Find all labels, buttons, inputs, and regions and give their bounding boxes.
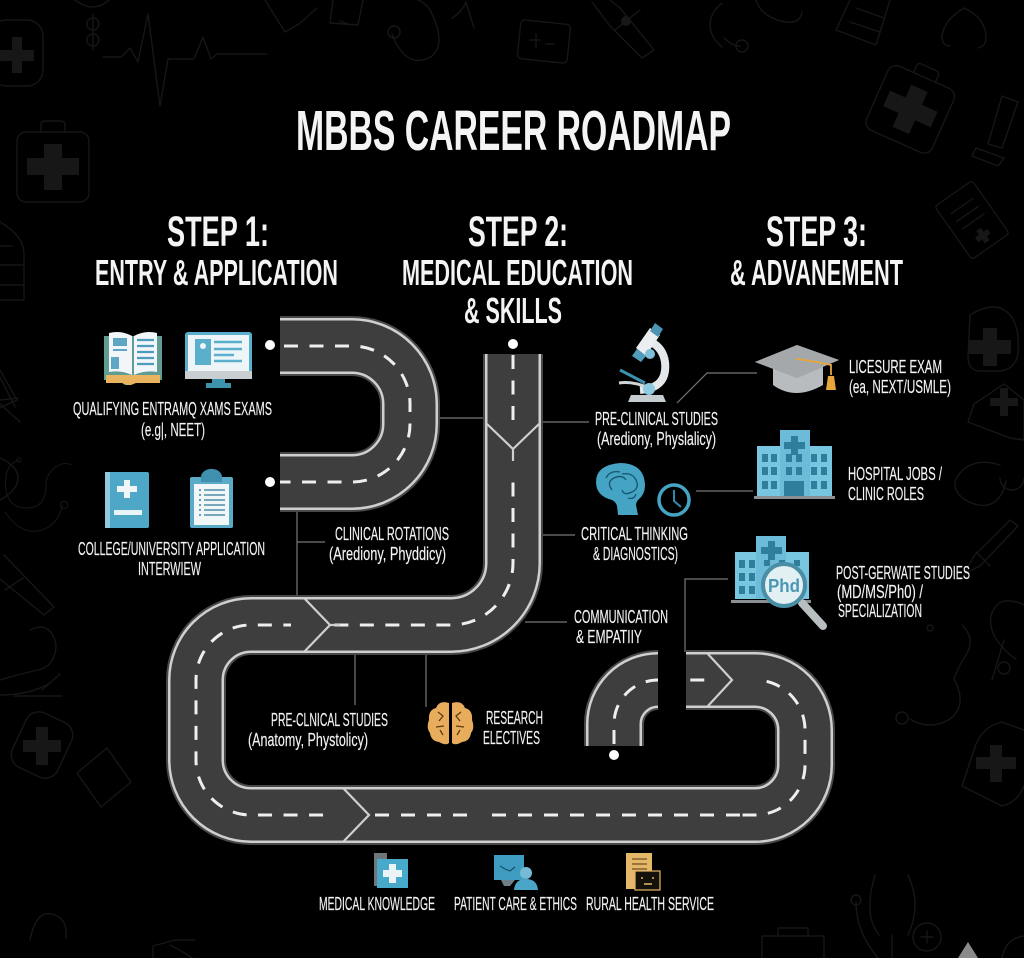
label: clinical rotations: (Arediony, Phyddicy) xyxy=(329,544,446,564)
label: critical thinking: & DIAGNOSTICS) xyxy=(593,544,678,564)
heading: step 3: STEP 3: xyxy=(766,208,867,256)
icon: microscope xyxy=(619,323,666,402)
label: college application: COLLEGE/UNIVERSITY APPLICATION xyxy=(78,539,265,559)
label: pre-clinical studies right: PRE-CLINICAL STUDIES xyxy=(595,409,718,429)
road: main winding road xyxy=(196,354,805,842)
bottom labels xyxy=(319,894,714,914)
heading: step 2: & SKILLS xyxy=(464,290,562,331)
label: research electives xyxy=(483,708,543,748)
label: pre-clinical studies right xyxy=(595,409,718,449)
title: MBBS CAREER ROADMAP xyxy=(296,99,731,163)
label: college application xyxy=(78,539,265,579)
label: post-graduate studies xyxy=(836,563,970,621)
label: communication: & EMPATIIY xyxy=(576,627,642,647)
label: critical thinking xyxy=(581,524,688,564)
label: licensure exam: LICESURE EXAM xyxy=(849,357,942,377)
label: licensure exam: (ea, NEXT/USMLE) xyxy=(849,377,951,397)
dash breaks at chevrons xyxy=(291,422,758,815)
heading: step 2: STEP 2: xyxy=(468,208,568,256)
bottom labels: PATIENT CARE & ETHICS xyxy=(454,894,577,914)
label: critical thinking: CRITICAL THINKING xyxy=(581,524,688,544)
heading: step 3 xyxy=(730,208,903,293)
label: qualifying exams xyxy=(73,399,272,440)
label: pre-clinical studies lower: (Anatomy, Phystolicy) xyxy=(248,730,368,750)
heading: step 2: MEDICAL EDUCATION xyxy=(402,252,633,293)
label: post-graduate studies: (MD/MS/Ph0) / xyxy=(837,582,923,602)
icon: hospital with magnifier: Phd xyxy=(768,576,800,596)
icon: open book xyxy=(104,332,162,385)
label: hospital jobs: CLINIC ROLES xyxy=(848,484,924,504)
heading: step 2 xyxy=(402,208,633,331)
label: communication xyxy=(574,607,668,647)
label: post-graduate studies: SPECIALIZATION xyxy=(838,601,922,621)
icon: hospital xyxy=(754,430,835,499)
heading: step 1: ENTRY & APPLICATION xyxy=(95,252,338,293)
label: licensure exam xyxy=(849,357,951,397)
heading: step 3: & ADVANEMENT xyxy=(730,252,903,293)
bottom labels: MEDICAL KNOWLEDGE xyxy=(319,894,435,914)
icon: blue medical book xyxy=(105,472,149,528)
icon: graduation cap xyxy=(755,345,839,393)
bottom straight dashes xyxy=(375,814,740,816)
label: research electives: ELECTIVES xyxy=(483,728,540,748)
heading: step 1: STEP 1: xyxy=(167,208,269,256)
icon: brain head xyxy=(596,463,645,515)
label: pre-clinical studies lower xyxy=(248,710,388,750)
bottom labels: RURAL HEALTH SERVICE xyxy=(586,894,714,914)
label: hospital jobs xyxy=(848,464,942,504)
icon: clipboard xyxy=(190,469,233,528)
label: clinical rotations: CLINICAL ROTATIONS xyxy=(335,524,449,544)
icon: medical knowledge folder xyxy=(374,853,408,888)
label: qualifying exams: (e.g|, NEET) xyxy=(141,420,205,440)
heading: step 1 xyxy=(95,208,338,293)
icon: clock xyxy=(659,485,689,515)
label: communication: COMMUNICATION xyxy=(574,607,668,627)
label: clinical rotations xyxy=(329,524,449,564)
label: research electives: RESEARCH xyxy=(486,708,543,728)
icon: rural health report xyxy=(626,853,660,890)
white corner mark xyxy=(958,942,978,958)
icon: patient care chat xyxy=(494,855,538,890)
label: college application: INTERWIEW xyxy=(138,559,201,579)
label: pre-clinical studies lower: PRE-CLNICAL STUDIES xyxy=(271,710,388,730)
label: hospital jobs: HOSPITAL JOBS / xyxy=(848,464,942,484)
connector lines xyxy=(297,373,757,707)
icon: computer monitor xyxy=(185,332,252,388)
chevrons xyxy=(304,424,732,842)
road: final segment to finish xyxy=(614,680,658,746)
icon: orange brain xyxy=(428,702,473,744)
label: pre-clinical studies right: (Arediony, Physlalicy) xyxy=(597,429,716,449)
road waypoint dots xyxy=(265,339,619,760)
label: qualifying exams: QUALIFYING ENTRAMQ XAMS EXAMS xyxy=(73,399,272,419)
icon: hospital with magnifier xyxy=(731,536,823,626)
road: entry U-curve xyxy=(280,346,410,482)
